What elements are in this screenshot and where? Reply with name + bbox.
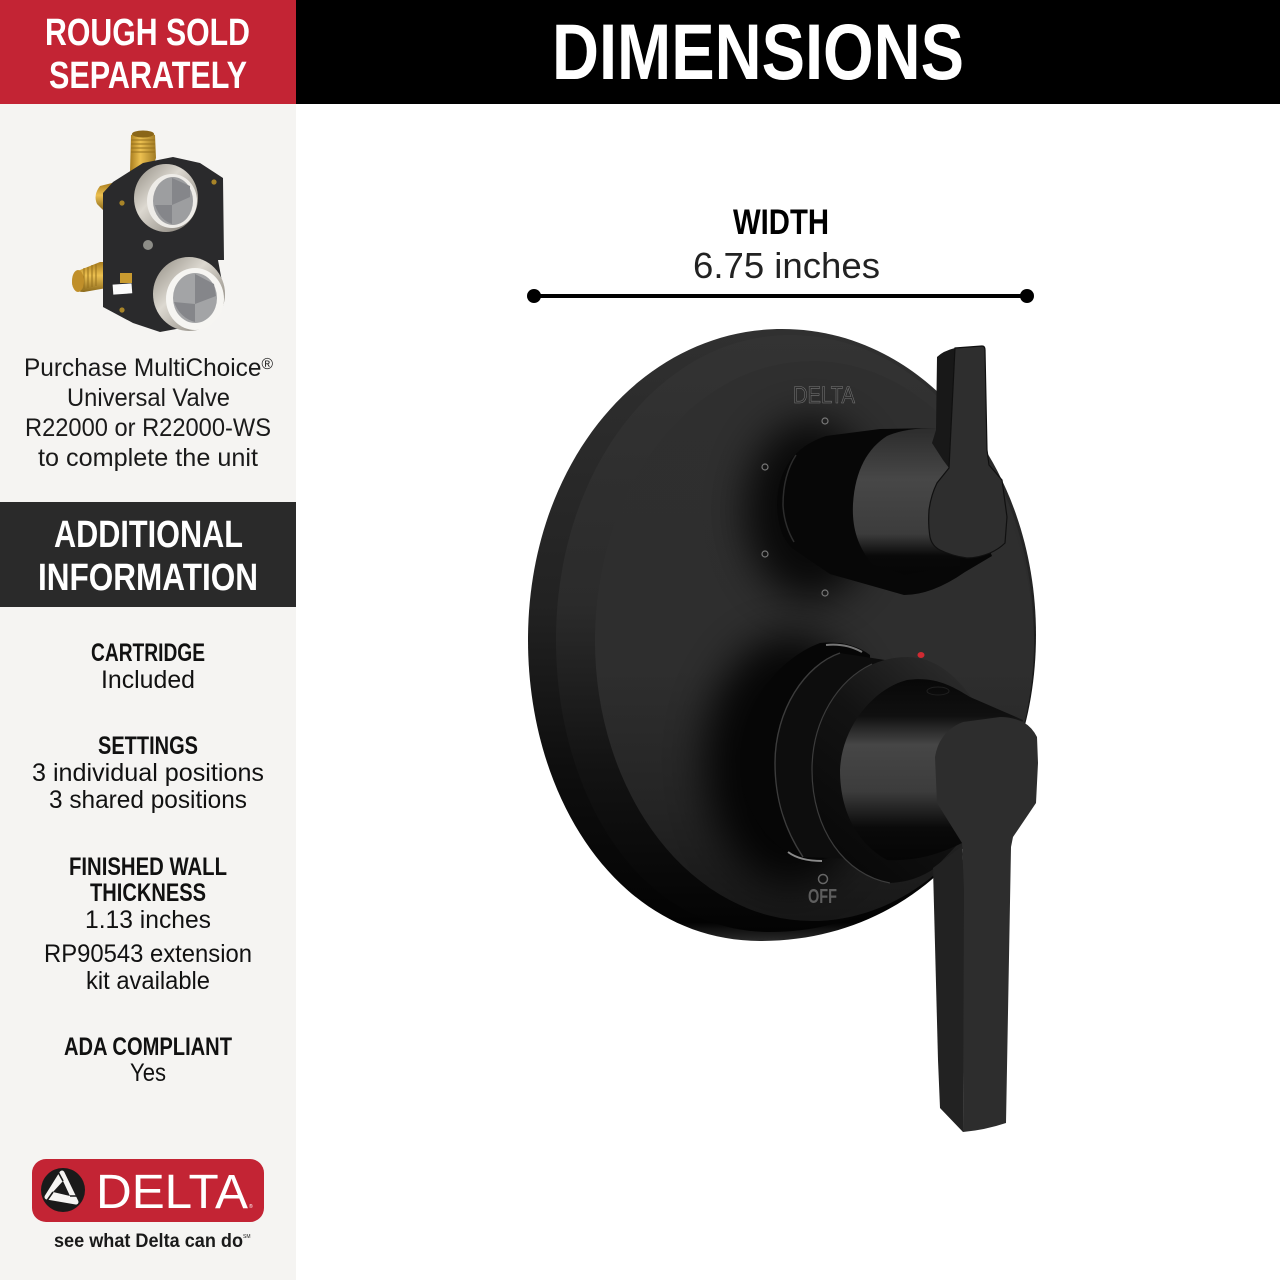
off marking: OFF <box>808 886 837 908</box>
spec: cartridge: Included <box>101 666 195 694</box>
off marking <box>808 874 837 908</box>
image: rough-in valve <box>72 130 225 332</box>
logo: delta: ® <box>249 1203 253 1210</box>
logo: delta: SM <box>243 1234 250 1240</box>
spec: settings <box>32 732 264 814</box>
spec: cartridge <box>91 639 205 694</box>
spec: ada compliant: Yes <box>130 1059 166 1087</box>
spec: finished wall thickness: kit available <box>86 967 210 995</box>
lower lever <box>933 717 1038 1132</box>
logo: delta: DELTA <box>96 1166 248 1219</box>
upper knob barrel <box>853 428 960 575</box>
text: purchase note: Universal Valve <box>67 384 230 412</box>
title: dimensions <box>296 0 1280 104</box>
lower left brass pipe <box>72 262 135 292</box>
text: purchase note: ® <box>261 356 273 373</box>
plate face <box>595 361 1029 921</box>
banner: rough sold separately <box>0 0 296 104</box>
left brass stub <box>96 183 118 210</box>
spec: finished wall thickness: 1.13 inches <box>85 906 211 934</box>
logo: delta <box>32 1159 264 1252</box>
text: purchase note: to complete the unit <box>38 444 258 472</box>
upper valve port <box>134 164 198 232</box>
mid plate ring <box>556 335 1034 932</box>
heading: additional information: ADDITIONAL <box>54 514 243 556</box>
text: purchase note: Purchase MultiChoice <box>24 354 267 382</box>
lower valve port <box>153 257 225 331</box>
lower knob flange <box>812 657 1000 883</box>
spec: cartridge: CARTRIDGE <box>91 639 205 667</box>
lower knob chrome edges <box>826 645 862 652</box>
spec: finished wall thickness: THICKNESS <box>90 879 206 907</box>
panel: sidebar background <box>0 0 296 1280</box>
spec: settings: 3 shared positions <box>49 786 247 814</box>
spec: ada compliant <box>64 1033 232 1087</box>
spec: settings: SETTINGS <box>98 732 198 760</box>
outer plate rim <box>528 329 1036 941</box>
text: purchase note <box>24 354 273 472</box>
banner: rough sold separately: SEPARATELY <box>49 55 247 97</box>
black mounting plate <box>103 157 224 332</box>
spec: finished wall thickness <box>44 853 252 995</box>
indicator dots <box>762 418 828 596</box>
upper lever <box>929 346 1007 558</box>
spec: ada compliant: ADA COMPLIANT <box>64 1033 232 1061</box>
title: dimensions: DIMENSIONS <box>552 7 964 96</box>
label: width: WIDTH <box>733 203 829 242</box>
banner: rough sold separately: ROUGH SOLD <box>45 12 250 54</box>
upper knob base <box>777 428 992 595</box>
spec: finished wall thickness: RP90543 extension <box>44 940 252 968</box>
heading: additional information <box>0 502 296 607</box>
logo: delta: see what Delta can do <box>54 1231 243 1252</box>
product: shower valve trim <box>528 329 1038 1132</box>
lower knob base <box>740 642 870 862</box>
text: purchase note: R22000 or R22000-WS <box>25 414 271 442</box>
label: width: 6.75 inches <box>693 245 880 286</box>
engraved delta: DELTA <box>793 382 855 409</box>
lower knob collar <box>775 653 885 860</box>
red hot indicator <box>918 652 924 658</box>
icon: delta mark <box>41 1168 85 1212</box>
spec: finished wall thickness: FINISHED WALL <box>69 853 227 881</box>
shadow around hubs <box>705 420 875 885</box>
top brass pipe <box>130 132 156 172</box>
lower knob barrel <box>840 679 1023 860</box>
label: width <box>693 203 880 286</box>
spec: settings: 3 individual positions <box>32 759 264 787</box>
heading: additional information: INFORMATION <box>38 557 258 599</box>
arrow: width dimension line <box>527 289 1034 303</box>
